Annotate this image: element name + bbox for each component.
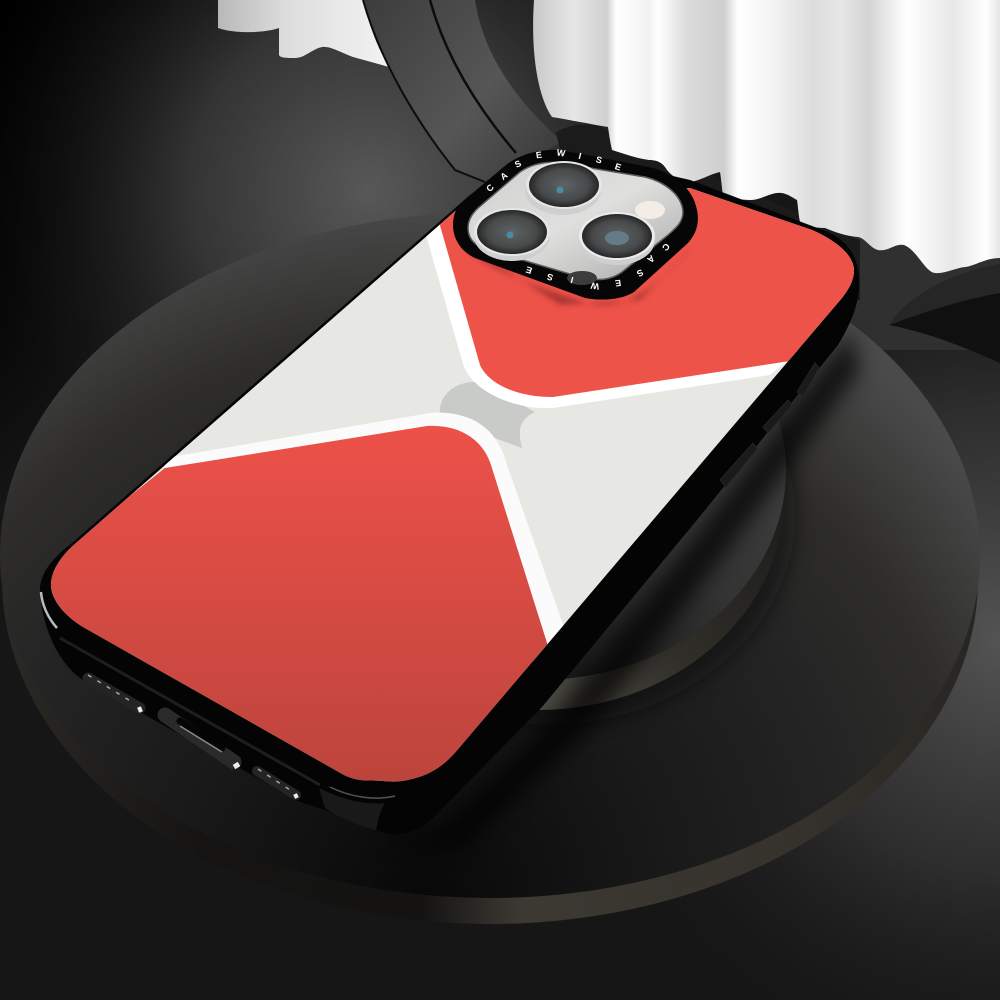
curtain: right: [533, 0, 1000, 273]
large disc: [0, 212, 980, 924]
small disc shadow: [295, 305, 795, 725]
charging port: [165, 715, 239, 767]
side button: upper: [797, 363, 819, 396]
white band lower: [165, 413, 565, 670]
microphone sensor: [567, 271, 597, 285]
dark wave shapes behind curtain: [556, 124, 860, 300]
side button: middle: [763, 400, 792, 433]
brand ring text: S: [635, 267, 645, 279]
red panel lower: [51, 426, 548, 782]
camera bump: [453, 147, 698, 305]
small disc top: [290, 260, 786, 680]
case body: [40, 150, 859, 834]
disc side: [2, 234, 978, 924]
arch: black stand: [363, 0, 562, 182]
brand ring text: E: [535, 150, 543, 160]
lens right: [579, 212, 655, 265]
brand ring text: S: [595, 154, 603, 166]
brand ring text: E: [614, 278, 622, 288]
brand ring text: I: [570, 275, 574, 285]
small disc: [290, 260, 795, 725]
screen artwork: [51, 188, 854, 782]
bottom speaker right: [257, 769, 297, 798]
bottom speaker left: [88, 675, 141, 712]
brand ring text: W: [556, 147, 566, 159]
case left corner glint: [41, 592, 57, 628]
side button: lower: [720, 443, 757, 487]
case bottom face sheen: [60, 638, 320, 785]
floor patch right of phone: [840, 230, 1000, 350]
apple logo shadow: [440, 382, 535, 448]
curtain: back left: [218, 0, 389, 67]
bump frame: [453, 150, 698, 300]
phone case: [40, 176, 859, 834]
brand ring text: A: [645, 253, 657, 265]
brand ring text: E: [614, 161, 622, 173]
brand ring text: S: [546, 271, 554, 283]
lens top: [525, 161, 602, 215]
brand ring text: C: [484, 182, 496, 194]
right dark stand: [889, 264, 1000, 363]
brand ring text: E: [525, 264, 533, 276]
bump shadow: [460, 240, 695, 305]
brand ring text: [484, 147, 672, 292]
brand ring text: S: [513, 158, 523, 170]
red panel upper: [440, 188, 854, 397]
case corner side face: [319, 788, 385, 830]
brand ring text: C: [660, 241, 672, 253]
disc top surface: [0, 212, 980, 898]
lens left: [474, 208, 550, 261]
screen gray base: [51, 188, 854, 782]
brand ring text: A: [498, 170, 510, 182]
flash: [635, 201, 665, 219]
phone shadow: [380, 330, 860, 850]
brand ring text: W: [590, 280, 600, 292]
bump glass: [468, 162, 683, 280]
white band upper: [424, 200, 800, 408]
case bottom edge gloss: [330, 787, 395, 798]
brand ring text: I: [578, 151, 582, 161]
small disc side: [292, 286, 784, 710]
